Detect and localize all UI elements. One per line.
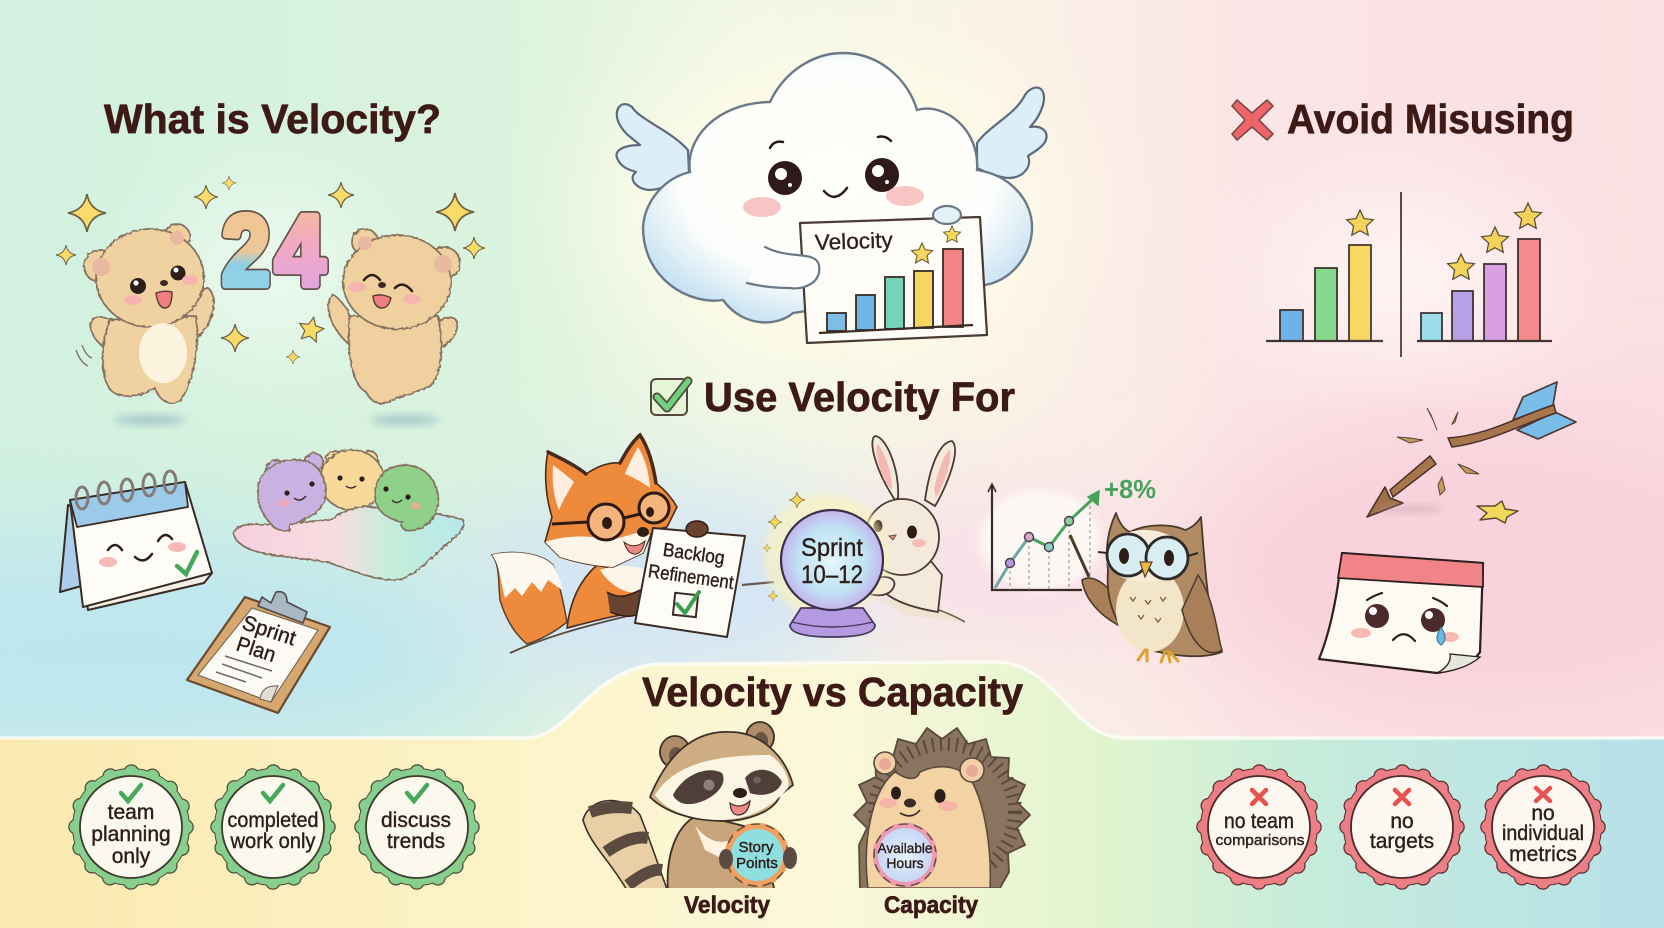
- icon: three plush toys under blanket: [233, 450, 464, 580]
- badge: available hours: [874, 824, 936, 886]
- icon: hedgehog: [854, 728, 1030, 890]
- badge: no team comparisons: comparisons: [1216, 832, 1304, 849]
- icon: smiling calendar: [60, 471, 212, 610]
- number 24: 2: [222, 195, 270, 307]
- panel: good practice badges: [72, 768, 476, 886]
- badge: story points: Story: [738, 839, 774, 856]
- chart: comparison bars left: [1266, 210, 1390, 345]
- icon: green checkbox: [651, 379, 688, 415]
- icon: broken arrow: [1367, 382, 1576, 523]
- badge: team planning only: team: [108, 801, 154, 824]
- badge: completed work only: work only: [230, 830, 316, 853]
- badge: no individual metrics: [1484, 768, 1602, 886]
- label: Velocity: Velocity: [684, 892, 771, 919]
- heading: Use Velocity For: Use Velocity For: [704, 374, 1015, 420]
- badge: team planning only: [72, 768, 190, 886]
- badge: no individual metrics: metrics: [1509, 843, 1577, 866]
- badge: no team comparisons: no team: [1224, 810, 1294, 833]
- panel: use velocity for: [492, 374, 1222, 662]
- icon: fox with glasses: [492, 435, 677, 653]
- icon: backlog refinement card: Backlog: [662, 540, 726, 569]
- panel: bottom band: [0, 662, 1664, 928]
- chart: velocity card: Velocity: [814, 227, 893, 255]
- icon: fallen star: [1477, 501, 1518, 523]
- icon: left bear: [76, 224, 214, 403]
- icon: cloud body: [643, 53, 1032, 322]
- badge: discuss trends: [358, 768, 476, 886]
- divider: [1400, 192, 1402, 357]
- chart: comparison bars right: [1410, 203, 1552, 345]
- badge: completed work only: completed: [228, 809, 318, 832]
- badge: team planning only: planning: [91, 823, 171, 846]
- text: Sprint Plan: Sprint: [239, 611, 299, 650]
- icon: red cross: [1232, 100, 1273, 140]
- badge: discuss trends: trends: [387, 830, 445, 853]
- icon: raccoon: [583, 722, 793, 892]
- icon: backlog refinement card: Refinement: [647, 561, 735, 594]
- icon: sparkles: [56, 176, 485, 364]
- chart: velocity card: [800, 217, 987, 343]
- text: Sprint 10-12: 10–12: [801, 561, 863, 589]
- panel: what is velocity: [56, 96, 485, 713]
- panel: avoid misusing: [1232, 96, 1576, 673]
- text: Sprint Plan: Plan: [233, 633, 279, 667]
- badge: available hours: Available: [878, 840, 933, 856]
- icon: owl with pointer: [1070, 513, 1222, 662]
- chart: trend line +8%: +8%: [1104, 474, 1156, 504]
- icon: sad calendar: [1319, 553, 1483, 673]
- badge: no targets: no: [1390, 810, 1414, 833]
- heading: Velocity vs Capacity: Velocity vs Capacity: [642, 669, 1023, 715]
- badge: story points: [719, 824, 797, 886]
- chart: trend line +8%: [980, 474, 1156, 590]
- badge: completed work only: [214, 768, 332, 886]
- icon: bear shadows: [114, 415, 439, 425]
- number 24: [222, 195, 325, 307]
- icon: cloud arms: [747, 206, 961, 288]
- text: Sprint Plan: [233, 611, 299, 667]
- icon: crystal ball: [763, 492, 888, 637]
- number 24: 4: [275, 195, 325, 307]
- heading: What is Velocity?: What is Velocity?: [104, 96, 441, 142]
- badge: no targets: [1343, 768, 1461, 886]
- badge: story points: Points: [736, 855, 778, 872]
- badge: no individual metrics: no: [1531, 802, 1555, 825]
- icon: sprint plan clipboard: [187, 592, 330, 713]
- badge: no targets: targets: [1370, 830, 1434, 853]
- heading: Avoid Misusing: Avoid Misusing: [1287, 96, 1574, 142]
- icon: wings: [617, 88, 1047, 190]
- icon: bunny: [865, 436, 965, 622]
- badge: team planning only: only: [112, 845, 151, 868]
- label: Capacity: Capacity: [884, 892, 979, 919]
- number 24: 4: [275, 195, 325, 307]
- panel: hero cloud mascot: [617, 53, 1047, 343]
- number 24: 2: [222, 195, 270, 307]
- panel: misuse badges: [1200, 768, 1602, 886]
- badge: available hours: Hours: [886, 855, 924, 871]
- badge: no team comparisons: [1200, 768, 1318, 886]
- panel: velocity vs capacity: [583, 669, 1030, 919]
- badge: no individual metrics: individual: [1502, 822, 1584, 845]
- icon: cloud face: [743, 136, 924, 217]
- text: Sprint 10-12: Sprint: [801, 534, 863, 562]
- text: Sprint 10-12: [801, 534, 863, 589]
- icon: backlog refinement card: [635, 521, 774, 637]
- badge: discuss trends: discuss: [381, 809, 451, 832]
- icon: right bear: [328, 229, 460, 404]
